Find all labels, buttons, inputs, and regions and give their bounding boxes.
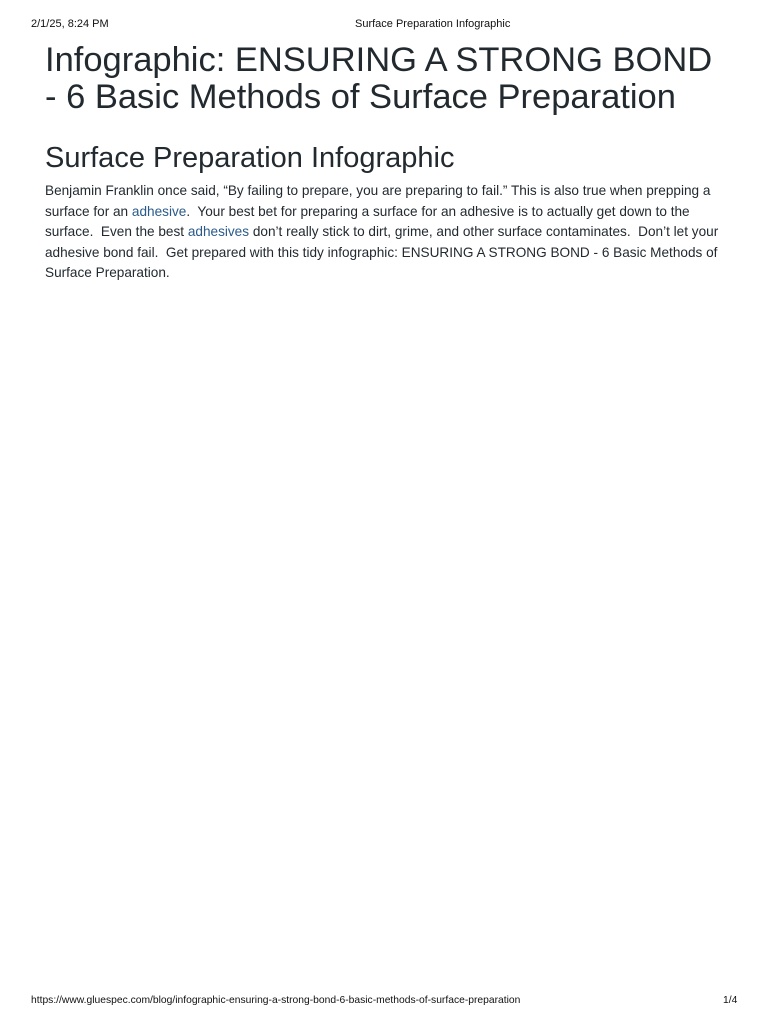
footer: page number: 1/4 (723, 995, 737, 1006)
subtitle: Surface Preparation Infographic (45, 142, 454, 174)
title: Infographic: ENSURING A STRONG BOND (45, 41, 712, 79)
text block: intro paragraph: surface for an adhesive. Your best bet for preparing a surface for an adhesive is to actually get down to the (45, 204, 690, 218)
title (45, 41, 712, 116)
text block: intro paragraph (45, 183, 718, 280)
header: date: 2/1/25, 8:24 PM (31, 18, 109, 30)
text block: intro paragraph: Surface Preparation. (45, 265, 170, 280)
text block: intro paragraph: adhesive bond fail. Get prepared with this tidy infographic: ENSURING A STRONG BOND - 6 Basic Methods of (45, 244, 717, 260)
title: - 6 Basic Methods of Surface Preparation (45, 78, 676, 116)
header: page title: Surface Preparation Infographic (355, 18, 510, 30)
footer: url: https://www.gluespec.com/blog/infographic-ensuring-a-strong-bond-6-basic-methods-of-surface-preparation (31, 995, 520, 1006)
text block: intro paragraph: Benjamin Franklin once said, “By failing to prepare, you are preparing to fail.” This is also true when prepping a (45, 183, 710, 198)
text block: intro paragraph: surface. Even the best adhesives don’t really stick to dirt, grime, and other surface contaminates. Don’t let your (45, 224, 718, 239)
